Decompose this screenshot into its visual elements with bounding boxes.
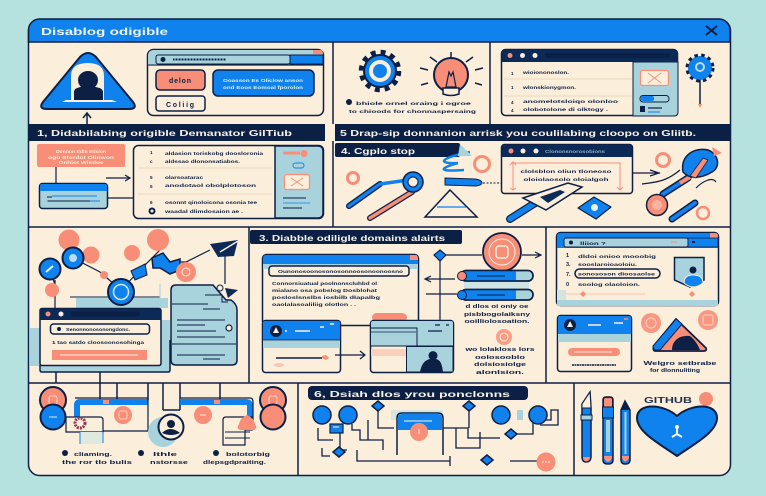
list rows: anomelotsloiqo olonloo bbox=[523, 99, 618, 104]
sidebar icons bbox=[283, 150, 310, 208]
list rows: anodotaol obolplotoson bbox=[165, 183, 256, 188]
list rows: wlonskionygmon. bbox=[522, 85, 576, 90]
list rows bbox=[566, 253, 660, 288]
icon: light bulb bbox=[420, 52, 483, 96]
list rows: 4 bbox=[511, 108, 514, 113]
list rows: osonnt qinoloicona osonia tee bbox=[165, 200, 258, 205]
right panel: window with list bbox=[556, 232, 718, 306]
pen 1 bbox=[581, 392, 592, 462]
panel 3: note text: wo lolakloss lors bbox=[464, 347, 535, 353]
window node bbox=[391, 410, 443, 455]
list rows: 0 bbox=[566, 282, 569, 288]
heading band 5: 5 Drap-sip donnanion arrisk you coulilabing cloopo on Gliitb. bbox=[340, 128, 696, 138]
panel 3: note text bbox=[464, 304, 535, 376]
callout: salmon note bbox=[37, 144, 125, 167]
button: delete bbox=[156, 70, 205, 90]
button: config bbox=[156, 96, 205, 111]
body text bbox=[272, 281, 380, 307]
button: delete: delon bbox=[169, 78, 191, 85]
list rows: 1 bbox=[511, 71, 514, 76]
window: list with sidebar bbox=[502, 50, 678, 116]
list rows: wioiononoslon. bbox=[522, 70, 569, 75]
body text: Connorsiuatual poolnonscluhbd ol bbox=[272, 281, 377, 286]
heading band 6 bbox=[308, 386, 528, 400]
right panel: caption: Welgro setbrabe bbox=[644, 361, 716, 367]
window: warning dialog: clolsblon oliun tloneoso bbox=[520, 169, 612, 174]
panel 3: lower right window with person bbox=[370, 320, 454, 372]
person badge bbox=[148, 414, 184, 447]
numbered list panel bbox=[134, 146, 324, 218]
list rows: 1 bbox=[566, 253, 569, 259]
icon: close bbox=[706, 26, 717, 35]
list rows: 6 bbox=[150, 200, 153, 205]
captions: dlepsgdpraiting. bbox=[203, 460, 267, 466]
list rows: 3. bbox=[566, 262, 571, 268]
panel 3: flow connector and target ring bbox=[425, 233, 541, 320]
window: warning dialog bbox=[502, 144, 632, 194]
icon: gear pin bbox=[687, 55, 713, 108]
list rows: olobotolone di olktogy . bbox=[523, 107, 608, 112]
body text: oaolalasoaliliig olotlon . . bbox=[272, 302, 356, 307]
panel 6: node flow diagram bbox=[313, 401, 558, 472]
icon: pliers tool bbox=[348, 172, 423, 218]
icon: heart with key bbox=[637, 406, 717, 456]
captions: lthle bbox=[153, 452, 177, 458]
text: tip: to chioods for chonnaspersaing bbox=[349, 109, 476, 114]
callout: salmon note: Donnon Edtn Edsion bbox=[56, 149, 107, 154]
icon: blue diamond bbox=[578, 197, 611, 219]
callout: salmon note: Onhiot Wisdos bbox=[58, 160, 105, 165]
list rows: soolog olaoloion. bbox=[578, 282, 640, 287]
icon: pens bbox=[581, 392, 630, 464]
captions bbox=[62, 450, 270, 466]
panel 3: note text: pisbbogolaiksny bbox=[464, 312, 530, 318]
body text: mialano osa pobslog Dosblohat bbox=[272, 288, 378, 293]
title: Disablog odigible bbox=[41, 26, 168, 38]
icon: spiral spring bbox=[444, 144, 490, 172]
right document bbox=[223, 415, 256, 445]
pen 3 bbox=[621, 401, 630, 464]
nodes bbox=[40, 229, 238, 305]
right panel: small window bbox=[558, 316, 632, 372]
label: GitHub: GITHUB bbox=[644, 396, 692, 405]
sidebar icons bbox=[640, 70, 669, 112]
heading band 3 bbox=[250, 230, 462, 244]
list rows: 1 bbox=[511, 85, 514, 90]
list rows: sonososon dioosaolse bbox=[578, 272, 656, 276]
panel 3: note text: dolsiosiolge bbox=[474, 362, 526, 368]
panel 3: pill rows bbox=[458, 270, 533, 300]
pen 2 bbox=[602, 397, 614, 464]
right panel: warning icon and rings bbox=[641, 310, 718, 351]
document panel bbox=[171, 285, 238, 365]
diamonds bbox=[333, 401, 517, 465]
list rows: 4 bbox=[511, 100, 514, 105]
left document bbox=[66, 417, 103, 444]
heading band 1: 1, Didabilabing origible Demanator GilTiub bbox=[37, 128, 292, 138]
list rows: 1 bbox=[150, 150, 153, 155]
browser window: Senonnonosonongdonc. bbox=[66, 327, 130, 332]
heading band 3: 3. Diabble odiligle domains alairts bbox=[259, 233, 445, 243]
list rows: aldssao dlononsatiabos. bbox=[165, 159, 240, 164]
blue nodes bbox=[313, 406, 547, 433]
text: tip bbox=[346, 99, 476, 114]
blue bracket left bbox=[77, 402, 148, 430]
icon: wrench cluster bbox=[633, 147, 722, 219]
heading band 5 bbox=[335, 124, 730, 141]
button: config: Coliig bbox=[166, 102, 194, 109]
panel 3: note text: oolosooblo bbox=[475, 355, 525, 361]
callout: blue note bbox=[213, 70, 314, 96]
end ring bbox=[536, 452, 556, 472]
captions: bolotorbig bbox=[226, 452, 270, 458]
text: tip: bhiole ornel oraing i ogroe bbox=[356, 101, 472, 106]
window: warning dialog: oloiolaosolo oloialgoh bbox=[524, 177, 609, 182]
list rows: sooslaroioaoloiu. bbox=[578, 262, 637, 267]
list rows: 7. bbox=[566, 272, 571, 278]
title bar bbox=[28, 19, 730, 42]
blue bracket right bbox=[180, 402, 250, 420]
status circles bbox=[40, 387, 286, 430]
heading band 1 bbox=[29, 124, 325, 141]
small window with connectors bbox=[40, 167, 133, 208]
panel 3: note text: d dlos oi oniy oe bbox=[466, 304, 529, 310]
list rows: waadal dlimdosaion ae . bbox=[164, 209, 243, 214]
bottom-left flow panel bbox=[40, 372, 286, 466]
list rows: 5 bbox=[150, 184, 153, 189]
callout: blue note: Ooasson Es Oliclow anson bbox=[223, 78, 304, 83]
body text: posloslsnslbs iosbilb dlapalbg bbox=[272, 295, 380, 300]
network diagram bbox=[30, 229, 238, 372]
heading band 4 bbox=[335, 143, 460, 157]
list rows: 5 bbox=[150, 175, 153, 180]
callout: blue note: ond Eoos Eomoal fporolon bbox=[223, 85, 304, 90]
window: warning dialog: Clononsnorosobions bbox=[545, 149, 606, 154]
list rows: dldoi onioo mooobig bbox=[578, 254, 656, 259]
captions: the ror tlo bulis bbox=[62, 460, 132, 466]
browser window bbox=[30, 308, 170, 372]
panel 3: main window: Ounonosoonosonosonnoosonoonoosno bbox=[278, 269, 404, 274]
right panel: caption: for dlonnuliting bbox=[650, 368, 700, 374]
list rows: c bbox=[150, 159, 153, 164]
window: delete settings bbox=[148, 50, 324, 116]
browser window: 1 tao satdo cloosoonosohinga bbox=[52, 340, 145, 345]
panel 3: note text: ooilliolosoation. bbox=[464, 319, 530, 325]
panel 3: main window bbox=[262, 254, 418, 326]
right panel: caption bbox=[644, 361, 716, 374]
icon: triangle with tool bbox=[425, 178, 501, 217]
list rows: aldasion toriskobg doosloronia bbox=[165, 151, 264, 156]
heading band 4: 4. Cgplo stop bbox=[341, 146, 415, 156]
panel 3: lower left window bbox=[262, 320, 365, 372]
list rows bbox=[148, 150, 264, 214]
icon: knife bbox=[510, 183, 582, 219]
right panel: window with list: lliion ? bbox=[580, 241, 606, 246]
list rows bbox=[511, 70, 618, 113]
icon: gear bbox=[361, 52, 399, 90]
icon: warning triangle with person bbox=[41, 53, 135, 124]
heading band 6: 6, Dsiah dlos yrou ponclonns bbox=[314, 389, 511, 399]
shield with person bbox=[674, 258, 704, 287]
panel 3: note text: alonlsion. bbox=[476, 370, 525, 376]
list rows: olarsoatarac bbox=[165, 175, 204, 180]
captions: cliaming. bbox=[74, 452, 113, 458]
icon: salmon dot bbox=[699, 392, 713, 406]
callout: salmon note: ogo Stordot Oliowon bbox=[48, 155, 115, 160]
captions: nstorsse bbox=[150, 460, 188, 466]
